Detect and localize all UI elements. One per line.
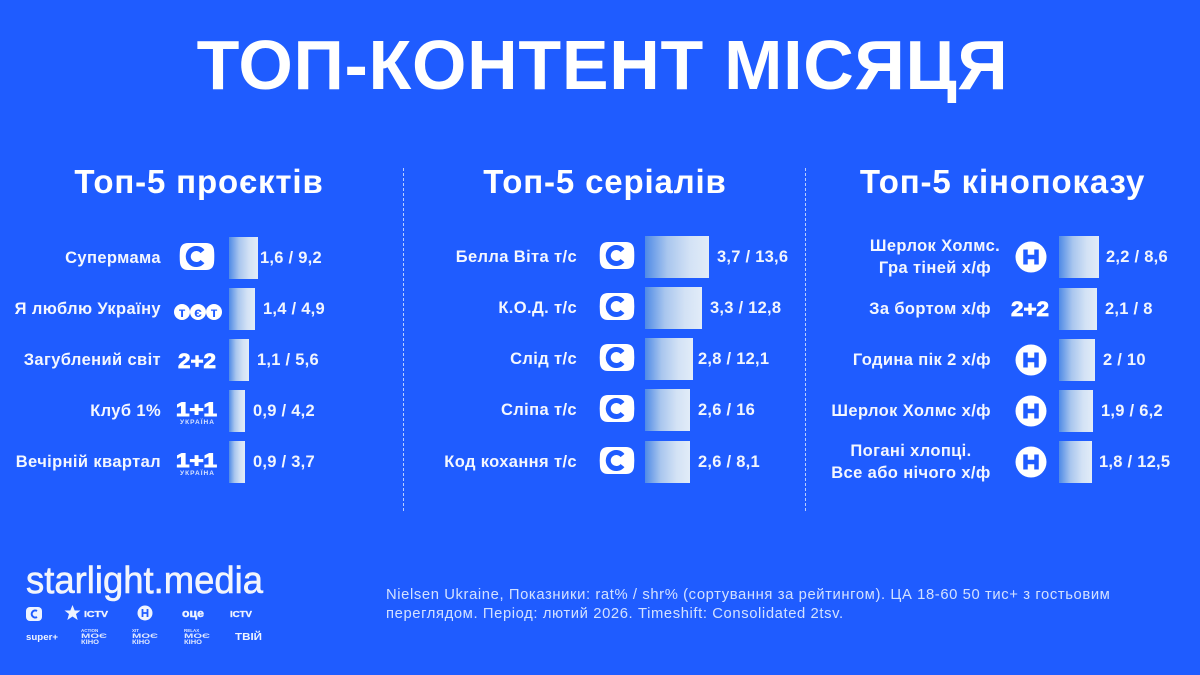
row: Загублений світ: 2+2 <box>178 350 216 373</box>
row: Загублений світ: 1,1 / 5,6 <box>257 351 319 369</box>
row: Шерлок Холмс <box>831 390 1163 432</box>
row: Вечірній квартал: УКРАЇНА <box>180 469 214 477</box>
row: Белла Віта: 3,7 / 13,6 <box>717 248 788 266</box>
row: Код кохання: 2,6 / 8,1 <box>698 453 760 471</box>
row: Загублений світ: Загублений світ <box>24 351 161 369</box>
row: За бортом: 2+2 <box>1011 298 1049 321</box>
icon: Action Моє Кіно: МОЄ <box>81 633 108 640</box>
row: Вечірній квартал <box>16 441 315 483</box>
row: Погані хлопці: 1,8 / 12,5 <box>1099 453 1170 471</box>
icon: Action Моє Кіно <box>81 628 108 646</box>
row: Клуб 1%: УКРАЇНА <box>180 418 214 426</box>
icon: channel С <box>26 607 42 621</box>
row: Супермама: Супермама <box>65 249 161 267</box>
panel: top-5 movies <box>831 163 1170 483</box>
icon: Хіт Моє Кіно: МОЄ <box>132 633 159 640</box>
row: Клуб 1%: 1+1 <box>176 400 218 421</box>
row: Слід: 2,8 / 12,1 <box>698 350 769 368</box>
row: Код кохання: Код кохання т/с <box>444 453 577 471</box>
row: Шерлок Холмс. Гра тіней: Шерлок Холмс. <box>870 237 1000 255</box>
icon: ICTV2: ICTV <box>230 610 253 619</box>
heading: top-5 projects: Топ-5 проєктів <box>74 163 324 200</box>
row: Клуб 1%: Клуб 1% <box>90 402 161 420</box>
heading: top-5 movies: Топ-5 кінопоказу <box>860 163 1145 200</box>
row: Вечірній квартал: 0,9 / 3,7 <box>253 453 315 471</box>
icon: Relax Моє Кіно <box>184 628 211 646</box>
row: За бортом: 2,1 / 8 <box>1105 300 1153 318</box>
row: Сліпа: Сліпа т/с <box>501 401 577 419</box>
row: Шерлок Холмс: Шерлок Холмс х/ф <box>831 402 991 420</box>
row: Погані хлопці <box>831 441 1170 483</box>
heading: top-5 series: Топ-5 серіалів <box>483 163 727 200</box>
row: Погані хлопці: Все або нічого х/ф <box>831 464 991 482</box>
row: Сліпа <box>501 389 755 431</box>
panel: top-5 series <box>444 163 788 483</box>
row: Вечірній квартал: Вечірній квартал <box>16 453 161 471</box>
row: Шерлок Холмс: 1,9 / 6,2 <box>1101 402 1163 420</box>
title: ТОП-КОНТЕНТ МІСЯЦЯ <box>197 26 1008 104</box>
row: Я люблю Україну: є <box>194 304 202 320</box>
row: К.О.Д.: 3,3 / 12,8 <box>710 299 781 317</box>
row: Година пік 2: Година пік 2 х/ф <box>853 351 991 369</box>
row: Клуб 1%: 0,9 / 4,2 <box>253 402 315 420</box>
row: Година пік 2: 2 / 10 <box>1103 351 1146 369</box>
row: Загублений світ <box>24 339 319 381</box>
panel: top-5 projects <box>15 163 325 483</box>
row: Шерлок Холмс. Гра тіней: Гра тіней х/ф <box>879 259 991 277</box>
row: К.О.Д. <box>498 287 781 329</box>
icon: Relax Моє Кіно: RELAX <box>184 628 199 633</box>
row: Я люблю Україну <box>15 288 325 330</box>
row: Код кохання <box>444 441 760 483</box>
source note <box>386 587 1110 622</box>
icon: ОЦЕ: оце <box>182 608 204 620</box>
row: Слід: Слід т/с <box>510 350 577 368</box>
row: Я люблю Україну: 1,4 / 4,9 <box>263 300 325 318</box>
icon: Хіт Моє Кіно: КІНО <box>132 639 150 646</box>
row: Я люблю Україну: т <box>179 304 186 320</box>
row: К.О.Д.: К.О.Д. т/с <box>498 299 577 317</box>
icon: Relax Моє Кіно: КІНО <box>184 639 202 646</box>
icon: Хіт Моє Кіно <box>132 628 159 646</box>
icon: Хіт Моє Кіно: ХІТ <box>132 628 139 633</box>
row: Белла Віта: Белла Віта т/с <box>456 248 577 266</box>
row: Шерлок Холмс. Гра тіней: 2,2 / 8,6 <box>1106 248 1168 266</box>
row: Година пік 2 <box>853 339 1146 381</box>
row: Клуб 1% <box>90 390 315 432</box>
icon: ICTV: ICTV <box>84 610 109 619</box>
icon: ICTV <box>64 605 109 620</box>
icon: Action Моє Кіно: ACTION <box>81 628 98 633</box>
row: Супермама <box>65 237 322 279</box>
row: Белла Віта <box>456 236 788 278</box>
row: Вечірній квартал: 1+1 <box>176 451 218 472</box>
wordmark: starlight.media <box>26 560 264 602</box>
row: За бортом: За бортом х/ф <box>869 300 991 318</box>
logo: starlight.media with channel marks <box>26 560 264 646</box>
icon: Action Моє Кіно: КІНО <box>81 639 99 646</box>
icon: super+: super+ <box>26 632 58 642</box>
row: Слід <box>510 338 769 380</box>
icon: Твій: ТВІЙ <box>235 630 262 643</box>
row: Я люблю Україну: т <box>211 304 218 320</box>
icon: Relax Моє Кіно: МОЄ <box>184 633 211 640</box>
row: Погані хлопці: Погані хлопці. <box>850 442 972 460</box>
row: Сліпа: 2,6 / 16 <box>698 401 755 419</box>
row: Шерлок Холмс. Гра тіней <box>870 236 1168 278</box>
source note: Nielsen Ukraine, Показники: rat% / shr% (сортування за рейтингом). ЦА 18-60 50 тис+ з гостьовим <box>386 587 1110 603</box>
source note: переглядом. Період: лютий 2026. Timeshift: Consolidated 2tsv. <box>386 606 844 622</box>
row: Я люблю Україну: Я люблю Україну <box>15 300 161 318</box>
row: Супермама: 1,6 / 9,2 <box>260 249 322 267</box>
row: За бортом <box>869 288 1153 330</box>
icon: Novyi <box>138 606 152 620</box>
